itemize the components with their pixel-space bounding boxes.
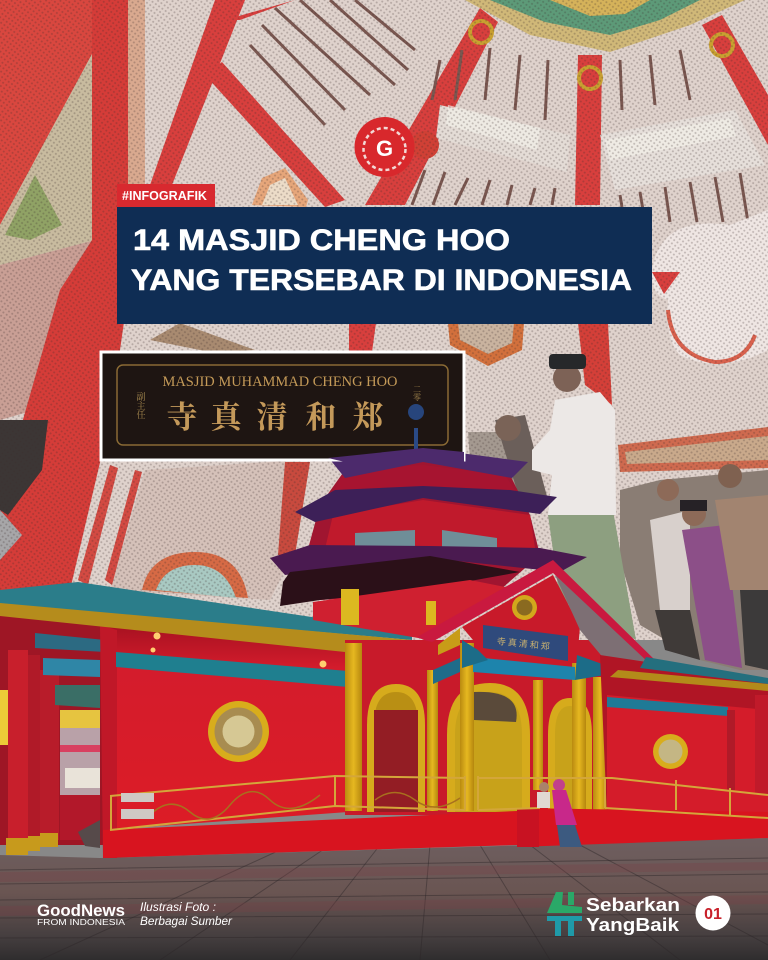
background: mosque ceiling photo: [0, 0, 768, 640]
title panel: 14 MASJID CHENG HOO: [133, 224, 510, 257]
round ornamental window right: [653, 734, 688, 769]
nameplate: Masjid Muhammad Cheng Hoo: [101, 352, 464, 460]
base platform: [103, 808, 768, 858]
nameplate: Masjid Muhammad Cheng Hoo: 副主任: [134, 391, 148, 420]
nameplate: Masjid Muhammad Cheng Hoo: 寺: [166, 392, 198, 437]
people in background: [495, 415, 768, 670]
blue ornamental bands: [433, 640, 605, 684]
pagoda tower: [270, 448, 587, 640]
top logo badge: G: [376, 136, 393, 161]
nameplate: Masjid Muhammad Cheng Hoo: 二零: [412, 385, 422, 402]
nameplate: Masjid Muhammad Cheng Hoo: 清: [256, 392, 288, 437]
page number badge: 01: [704, 906, 722, 923]
ground paving: [0, 838, 768, 960]
footer: photo credit: Ilustrasi Foto :: [140, 900, 216, 914]
gable roof: [417, 560, 658, 664]
arches: [367, 683, 592, 812]
woman and child: [537, 779, 582, 847]
finial over nameplate: [328, 404, 464, 462]
gold railing: [110, 775, 768, 830]
footer: GoodNews from Indonesia logo: [37, 902, 126, 927]
nameplate: Masjid Muhammad Cheng Hoo: 和: [306, 392, 336, 437]
title panel: YANG TERSEBAR DI INDONESIA: [131, 264, 632, 297]
top logo badge: [354, 117, 414, 177]
gold columns: [345, 643, 607, 811]
footer: GoodNews from Indonesia logo: FROM INDONESIA: [37, 918, 126, 927]
gable medallion: [512, 595, 537, 620]
man in white shirt: [532, 354, 636, 640]
footer: Sebarkan Yang Baik wordmark: YangBaik: [586, 914, 680, 935]
round ornamental window: [208, 701, 269, 762]
lights on wall: [150, 632, 326, 668]
left teal roof: [0, 582, 424, 655]
footer: GoodNews from Indonesia logo: GoodNews: [37, 902, 125, 920]
nameplate: Masjid Muhammad Cheng Hoo: 真: [210, 392, 246, 437]
tag: infografik: [117, 184, 215, 207]
right wing: [600, 655, 768, 816]
footer: Sebarkan Yang Baik wordmark: Sebarkan: [586, 894, 680, 915]
icon: Sebarkan Yang Baik hash logo: [547, 892, 582, 936]
left colonnade and opening: [0, 605, 105, 855]
tag: infografik: #INFOGRAFIK: [122, 189, 207, 203]
footer: photo credit: Berbagai Sumber: [140, 914, 233, 928]
plaque on gable: [483, 625, 568, 661]
title panel: [117, 207, 652, 324]
nameplate: Masjid Muhammad Cheng Hoo: 郑: [352, 392, 384, 437]
wall ornamental band: [116, 652, 348, 687]
page number badge: [696, 896, 730, 930]
footer: Sebarkan Yang Baik wordmark: [586, 894, 680, 935]
main red wall: [100, 615, 348, 858]
footer: photo credit: [140, 900, 233, 928]
central porch: [345, 560, 658, 815]
nameplate: Masjid Muhammad Cheng Hoo: MASJID MUHAMMAD CHENG HOO: [162, 374, 398, 390]
plaque on gable: 寺真清和郑: [496, 635, 552, 652]
